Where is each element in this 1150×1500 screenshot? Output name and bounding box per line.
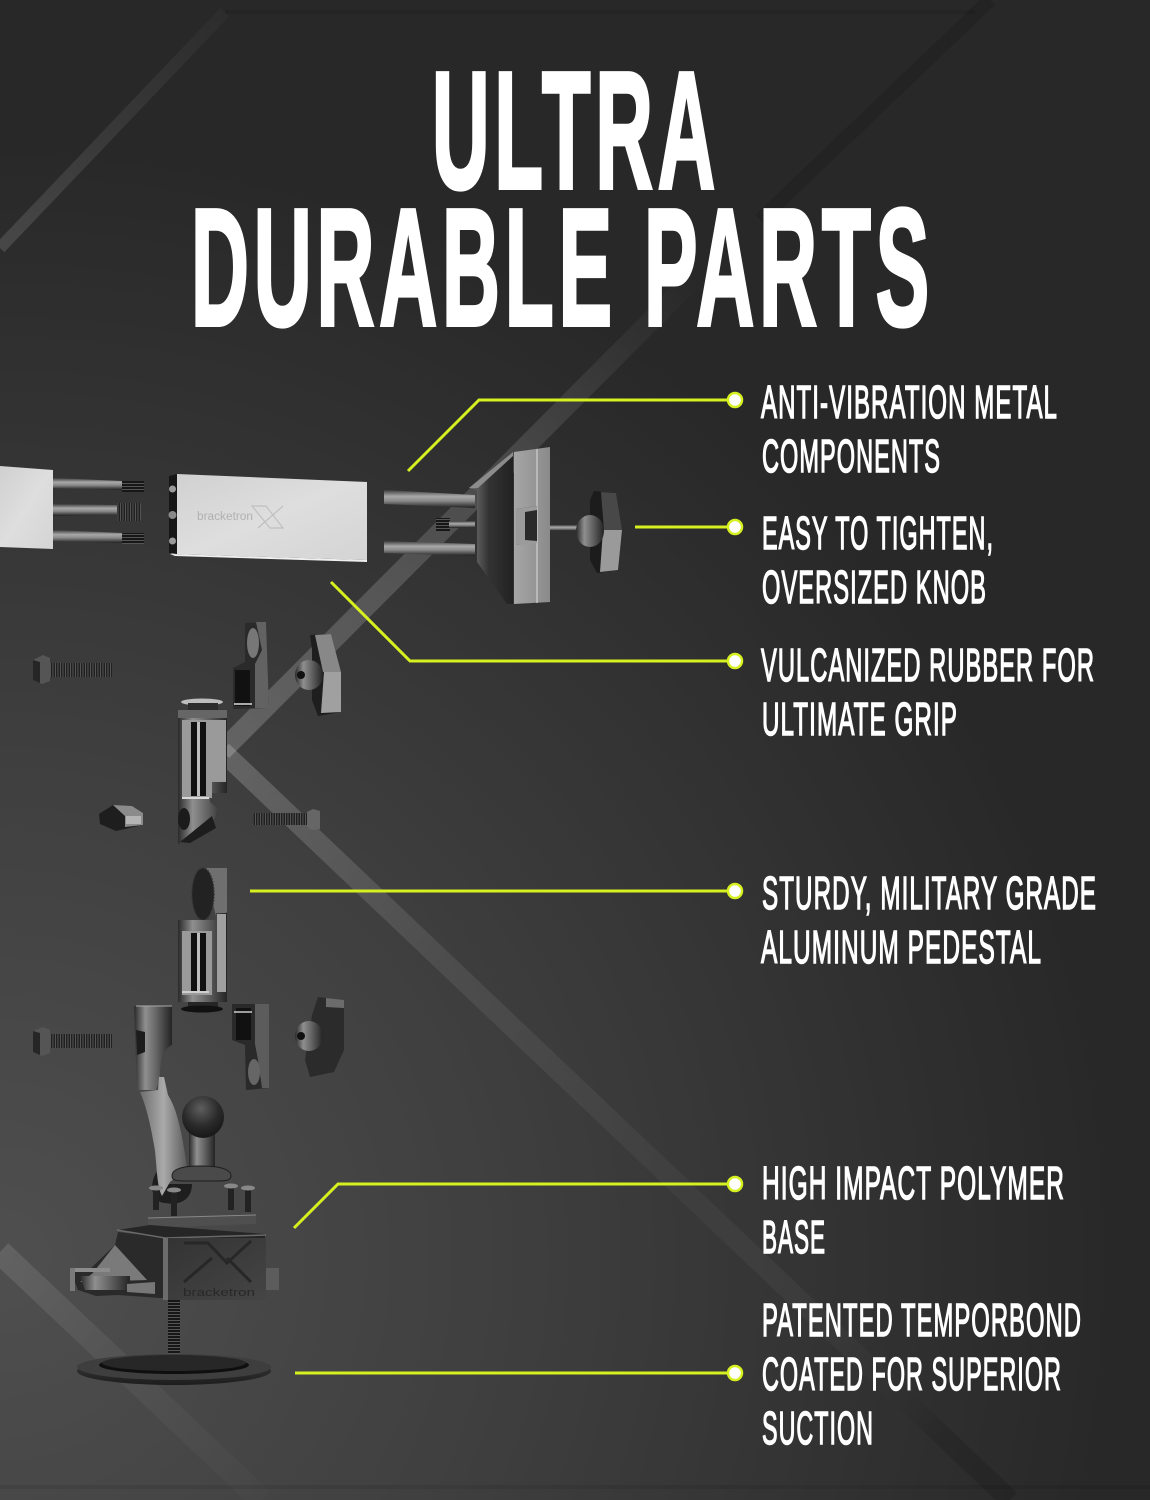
part: oversized knob on clamp: [550, 491, 622, 573]
part: silver rail with logo: bracketron: [197, 511, 253, 523]
callout: anti-vibration metal components: COMPONENTS: [762, 430, 941, 482]
title: [191, 38, 934, 361]
part: left rail section with rods: [0, 466, 144, 549]
part: right hex bolt: [252, 809, 320, 830]
part: lower wing knob: [295, 997, 344, 1077]
part: lower clip: [232, 1004, 269, 1090]
part: high impact polymer base: bracketron: [183, 1287, 255, 1299]
callout: temporbond suction: [295, 1294, 1082, 1454]
part: nut: [99, 805, 143, 831]
part: left hex bolt upper: [33, 655, 112, 684]
part: left hex bolt lower: [33, 1027, 112, 1056]
part: phone clamp with rods: [384, 447, 550, 604]
title: ULTRA: [432, 38, 720, 224]
part: upper aluminum pedestal: [178, 698, 227, 844]
part: mounting plate: [148, 1215, 256, 1227]
callout: polymer base: BASE: [762, 1211, 826, 1263]
part: high impact polymer base: [70, 1225, 279, 1300]
callout: temporbond suction: SUCTION: [762, 1402, 874, 1454]
part: curved mount arm: [134, 1006, 192, 1204]
part: suction disc with threaded post: [77, 1300, 271, 1385]
part: lower aluminum pedestal with gear: [178, 868, 227, 1012]
part: ball and flange: [172, 1096, 231, 1181]
callout: anti-vibration metal components: [408, 376, 1058, 482]
callout: vulcanized rubber: [331, 582, 1095, 745]
callout: aluminum pedestal: [250, 867, 1097, 973]
callout: easy to tighten knob: [635, 507, 994, 613]
part: upper clip: [233, 622, 269, 709]
part: small screws: [149, 1184, 255, 1216]
callout: vulcanized rubber: ULTIMATE GRIP: [762, 693, 958, 745]
part: upper wing knob: [295, 634, 341, 716]
part: silver rail with logo: [168, 474, 367, 562]
callout: polymer base: [294, 1157, 1065, 1263]
